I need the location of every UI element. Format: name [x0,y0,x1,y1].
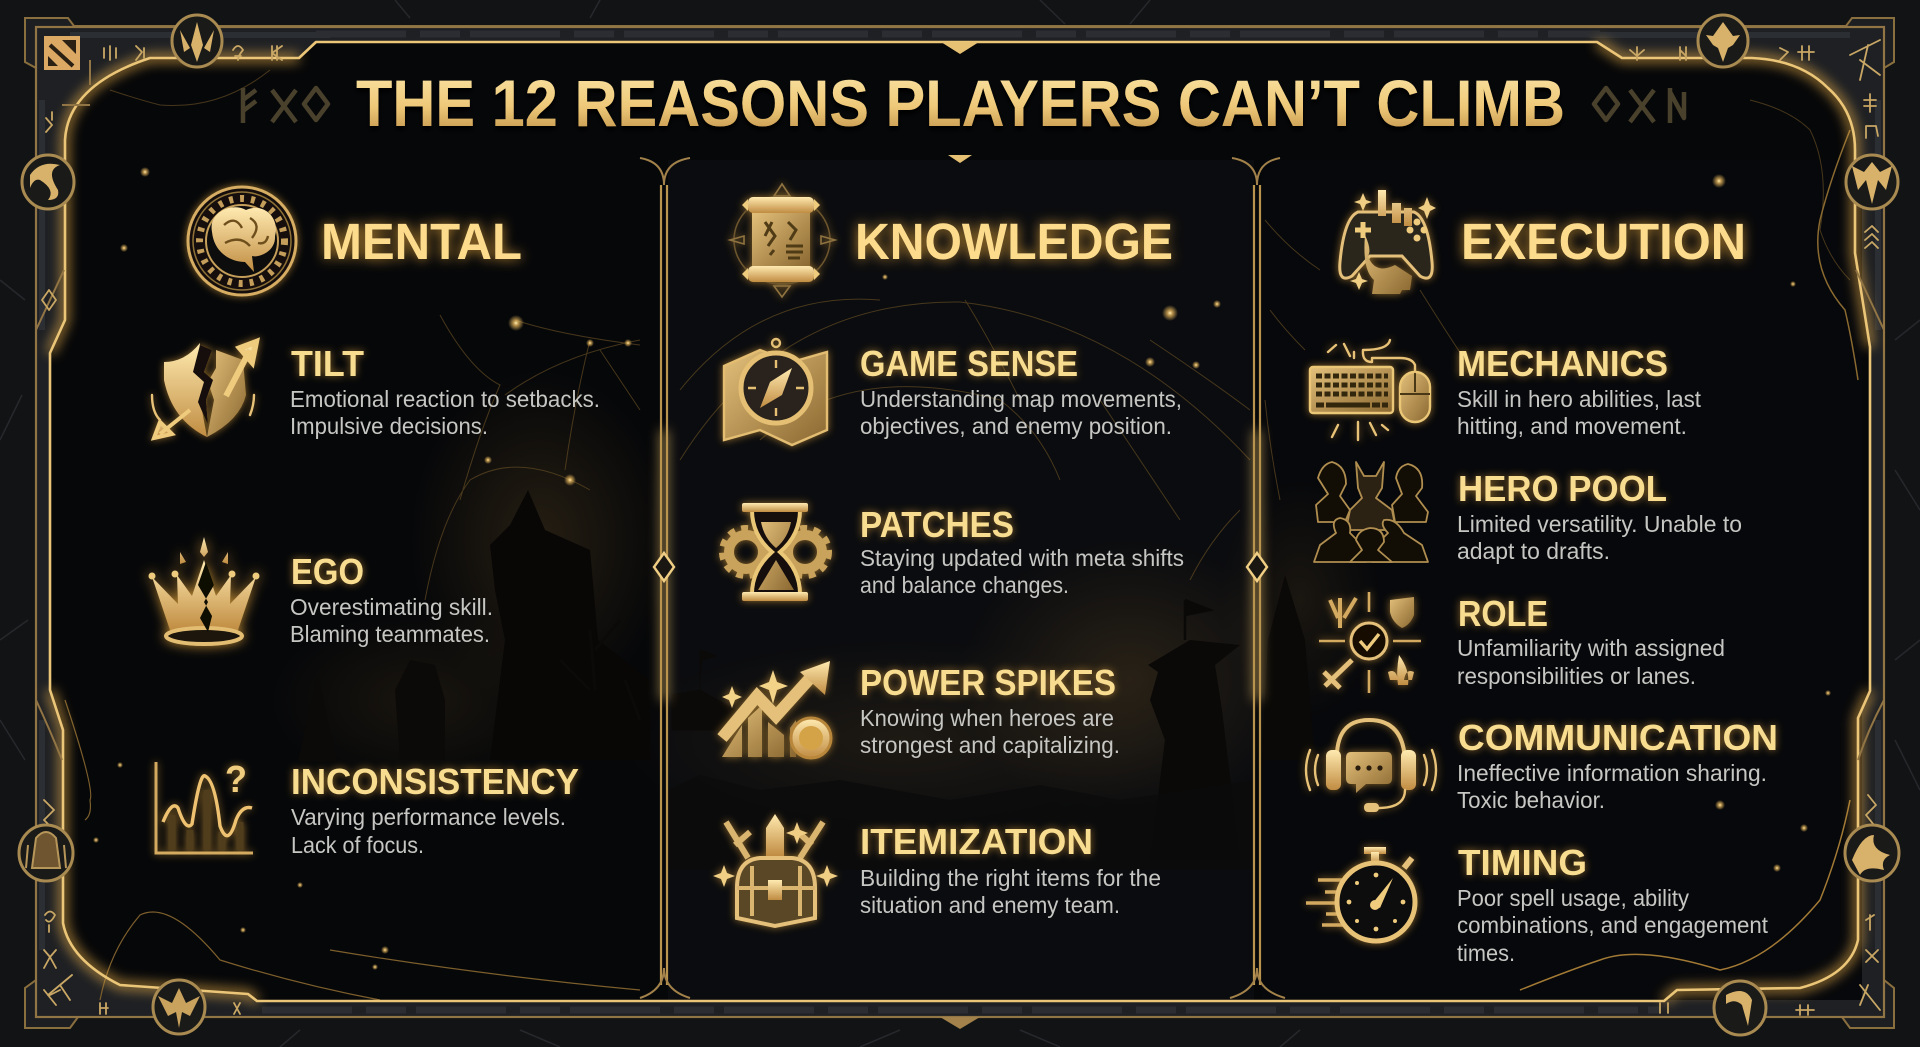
description: tilt: Impulsive decisions. [290,413,488,439]
medallion: left upper [22,155,74,209]
description: role: responsibilities or lanes. [1457,663,1696,689]
medallion: right upper [1846,155,1898,209]
item: patches [722,503,1184,601]
description: timing: times. [1457,940,1515,966]
description: communication [1457,760,1767,813]
medallion: right lower [1845,825,1899,881]
icon: treasure chest and swords [713,814,838,926]
heading: power spikes: POWER SPIKES [860,662,1116,703]
icon: map and compass [724,339,827,445]
heading: ego: EGO [291,551,364,592]
medallion: bottom right [1714,981,1766,1035]
title runes left [243,88,328,123]
description: power spikes: Knowing when heroes are [860,705,1114,731]
icon: broken shield with arrow [152,342,256,438]
medallion: top right [1698,15,1748,67]
heading: mechanics: MECHANICS [1457,343,1668,384]
description: hero pool [1457,511,1742,564]
item: timing [1306,842,1769,966]
icon: controller and hand [1340,190,1436,294]
heading: patches: PATCHES [860,504,1014,545]
item: itemization [713,814,1161,926]
title: THE 12 REASONS PLAYERS CAN’T CLIMB [356,66,1565,140]
description: inconsistency: Lack of focus. [291,832,424,858]
description: itemization [860,865,1161,918]
item: tilt [152,342,600,439]
description: mechanics: hitting, and movement. [1457,413,1687,439]
item: mechanics [1310,340,1702,440]
medallion: left lower [19,825,73,881]
description: role: Unfamiliarity with assigned [1457,635,1725,661]
icon: dota logo corner [44,36,80,70]
icon: rising arrow and coin [722,661,831,758]
description: ego: Overestimating skill. [290,594,493,620]
item: role [1319,592,1725,693]
description: itemization: Building the right items for the [860,865,1161,891]
icon: scroll [730,184,835,297]
icon: role selector [1319,592,1421,693]
description: mechanics [1457,386,1702,439]
description: timing [1457,885,1769,966]
description: patches [860,545,1184,598]
icon: keyboard and mouse [1310,340,1430,440]
description: game sense: Understanding map movements, [860,386,1182,412]
description: timing: Poor spell usage, ability [1457,885,1689,911]
column dividers [390,155,1530,998]
description: ego [290,594,493,647]
background landscape haze and silhouettes [270,370,1380,870]
icon: brain medallion [188,187,296,295]
description: tilt: Emotional reaction to setbacks. [290,386,600,412]
panel: mental [148,187,600,858]
icon: hourglass and gears [722,503,829,601]
description: hero pool: adapt to drafts. [1457,538,1610,564]
description: inconsistency: Varying performance levels. [291,804,566,830]
heading: tilt: TILT [291,343,364,384]
icon: cracked crown [148,537,260,644]
description: tilt [290,386,600,439]
icon: speeding stopwatch [1306,847,1415,941]
item: inconsistency [156,759,579,858]
icon: wavering chart: ? [225,759,247,801]
icon: wavering chart [156,759,253,853]
heading: inconsistency: INCONSISTENCY [291,761,579,802]
heading: role: ROLE [1458,593,1548,634]
sparks [93,167,1831,970]
item: game sense [724,339,1182,445]
description: patches: and balance changes. [860,572,1069,598]
icon: hero silhouettes [1314,462,1428,562]
description: game sense: objectives, and enemy position. [860,413,1172,439]
medallion: top left [172,15,222,67]
item: ego [148,537,493,647]
heading: knowledge: KNOWLEDGE [855,213,1173,270]
description: ego: Blaming teammates. [290,621,490,647]
description: communication: Toxic behavior. [1457,787,1605,813]
panel: execution [1306,190,1778,966]
description: power spikes: strongest and capitalizing. [860,732,1120,758]
item: hero pool [1314,462,1742,564]
description: mechanics: Skill in hero abilities, last [1457,386,1702,412]
icon: headset and chat bubble [1306,720,1436,812]
description: itemization: situation and enemy team. [860,892,1120,918]
panel: knowledge [713,184,1184,926]
title runes right [1594,88,1684,123]
heading: hero pool: HERO POOL [1458,468,1667,509]
medallion: bottom left [153,980,205,1034]
item: communication [1306,717,1778,813]
description: role [1457,635,1725,689]
description: timing: combinations, and engagement [1457,912,1769,938]
description: communication: Ineffective information sharing. [1457,760,1767,786]
description: inconsistency [291,804,566,858]
item: power spikes [722,661,1120,758]
heading: communication: COMMUNICATION [1458,717,1778,758]
heading: itemization: ITEMIZATION [860,821,1093,862]
heading: timing: TIMING [1458,842,1587,883]
description: hero pool: Limited versatility. Unable to [1457,511,1742,537]
heading: game sense: GAME SENSE [860,343,1078,384]
chevron ornaments [940,42,980,1029]
heading: execution: EXECUTION [1461,213,1746,270]
description: game sense [860,386,1182,439]
heading: mental: MENTAL [321,213,522,270]
description: power spikes [860,705,1120,758]
description: patches: Staying updated with meta shifts [860,545,1184,571]
